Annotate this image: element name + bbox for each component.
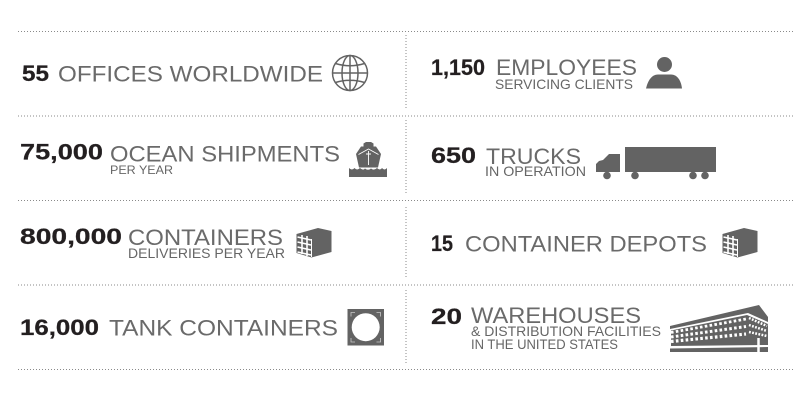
sublabel: per year: PER YEAR (110, 163, 173, 177)
number: 15: 15 (431, 231, 453, 256)
number: 75,000: 75,000 (20, 140, 103, 164)
icon: globe (332, 56, 368, 90)
label: ocean shipments: OCEAN SHIPMENTS (110, 142, 340, 166)
icon: container block (296, 228, 332, 258)
label: warehouses: WAREHOUSES (471, 303, 641, 328)
icon: container block (722, 228, 758, 258)
panel: employees (431, 55, 682, 92)
sublabel: deliveries per year: DELIVERIES PER YEAR (128, 245, 285, 261)
icon: warehouse building (670, 305, 768, 352)
panel: container depots (431, 228, 758, 258)
label: trucks: TRUCKS (486, 144, 581, 169)
panel: containers (20, 224, 332, 261)
sublabel: in operation: IN OPERATION (485, 163, 586, 179)
label: containers: CONTAINERS (128, 225, 283, 250)
panel: ocean shipments (20, 140, 387, 177)
label: offices worldwide: OFFICES WORLDWIDE (58, 62, 323, 86)
panel: offices (22, 56, 368, 90)
number: 16,000: 16,000 (20, 315, 99, 340)
panel: trucks (431, 143, 716, 179)
icon: person (646, 57, 682, 88)
icon: ship (349, 142, 387, 177)
icon: truck (596, 147, 716, 179)
number: 55: 55 (22, 61, 49, 86)
number: 650: 650 (431, 143, 476, 168)
number: 800,000: 800,000 (20, 224, 122, 249)
number: 1,150: 1,150 (431, 55, 485, 80)
sublabel: servicing clients: SERVICING CLIENTS (495, 76, 633, 92)
label: tank containers: TANK CONTAINERS (109, 316, 338, 340)
sublabel: in the united states: IN THE UNITED STATES (471, 336, 618, 352)
number: 20: 20 (431, 304, 462, 329)
panel: warehouses (431, 303, 768, 352)
sublabel: distribution facilities: & DISTRIBUTION FACILITIES (471, 323, 661, 339)
label: employees: EMPLOYEES (496, 55, 637, 80)
icon: tank container (348, 309, 384, 346)
label: container depots: CONTAINER DEPOTS (465, 232, 707, 256)
panel: tank containers (20, 309, 384, 346)
